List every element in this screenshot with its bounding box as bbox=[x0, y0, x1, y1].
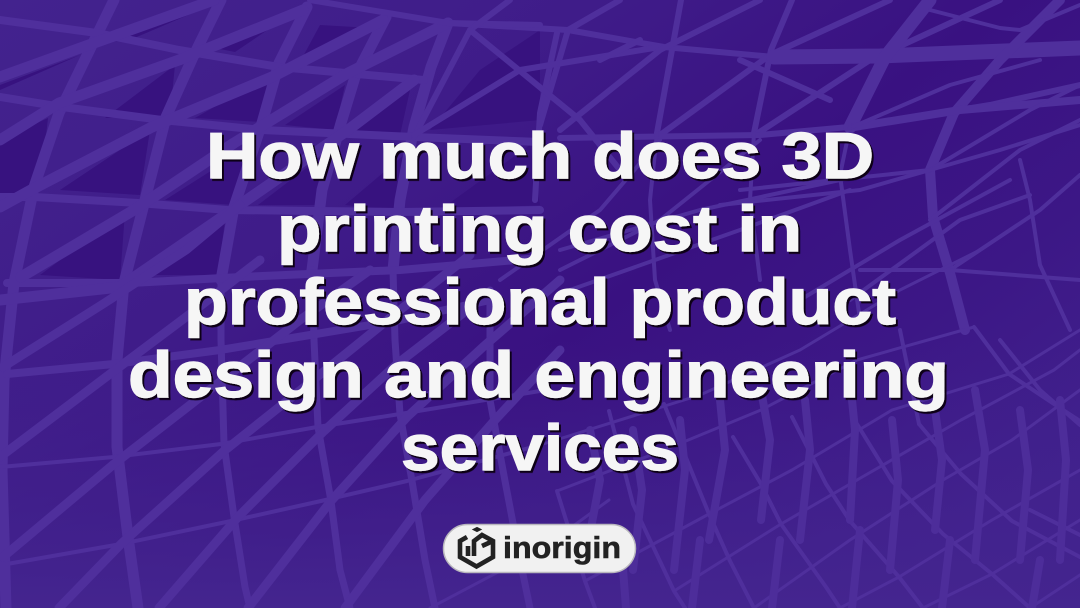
title: printing cost in bbox=[277, 192, 802, 265]
lower right lens-shaped verticals bbox=[585, 380, 1066, 608]
badge pill bbox=[444, 524, 636, 572]
title: design and engineering bbox=[128, 338, 949, 411]
lower right curved lattice: descending arcs bbox=[557, 327, 1080, 608]
left diagonals bbox=[0, 0, 448, 300]
logo badge bbox=[444, 524, 636, 572]
icon: inorigin hexagon mark bbox=[460, 528, 493, 566]
left horizontals bbox=[0, 20, 540, 374]
title: How much does 3D bbox=[206, 119, 874, 192]
left verticals bbox=[2, 0, 448, 608]
lower right rising thin lines bbox=[430, 250, 1080, 608]
darker wedge shadows in upper-left cells bbox=[0, 8, 540, 280]
upper middle and right structure bbox=[310, 0, 1080, 200]
title: professional product bbox=[184, 265, 896, 338]
title: services bbox=[401, 411, 679, 484]
title bbox=[128, 119, 949, 484]
logo wordmark: inorigin bbox=[503, 530, 621, 565]
